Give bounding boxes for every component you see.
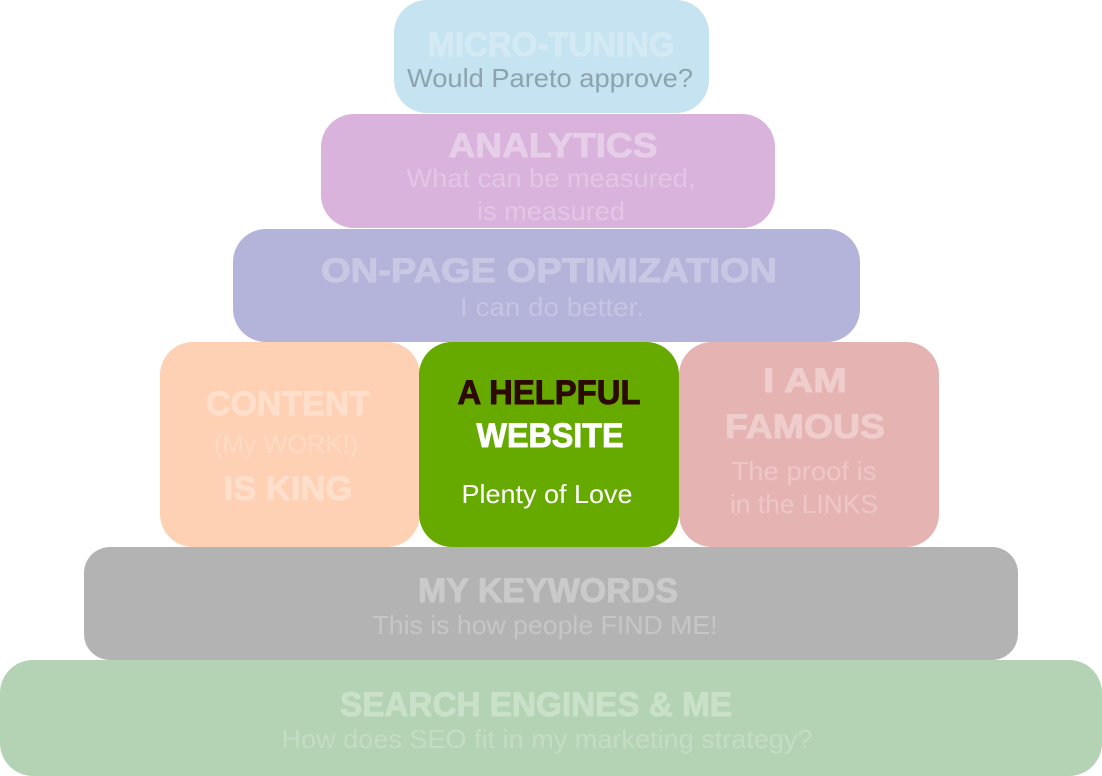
heading: search engines and me: SEARCH ENGINES & ME bbox=[340, 686, 732, 724]
text: is measured: is measured bbox=[477, 196, 625, 226]
heading: analytics: ANALYTICS bbox=[448, 127, 658, 165]
panel: search engines and me bbox=[0, 660, 1102, 776]
heading: famous: FAMOUS bbox=[725, 408, 885, 446]
text: this is how people find me: This is how people FIND ME! bbox=[372, 610, 718, 640]
heading: a helpful: A HELPFUL bbox=[458, 374, 640, 412]
heading: i am: I AM bbox=[763, 362, 847, 400]
panel: analytics bbox=[321, 114, 775, 228]
panel: my keywords bbox=[84, 547, 1018, 660]
heading: micro-tuning: MICRO-TUNING bbox=[428, 26, 674, 64]
heading: website: WEBSITE bbox=[476, 417, 624, 455]
heading: on-page optimization: ON-PAGE OPTIMIZATION bbox=[321, 252, 777, 290]
text: plenty of love: Plenty of Love bbox=[462, 479, 632, 509]
text: in the links: in the LINKS bbox=[730, 489, 878, 519]
panel: micro-tuning bbox=[394, 0, 709, 113]
heading: is king: IS KING bbox=[224, 470, 352, 508]
text: the proof is: The proof is bbox=[732, 456, 876, 486]
heading: my keywords: MY KEYWORDS bbox=[418, 572, 678, 610]
text: i can do better: I can do better. bbox=[460, 292, 644, 322]
panel: a helpful website bbox=[419, 342, 679, 547]
panel: on-page optimization bbox=[233, 229, 860, 342]
text: how does seo fit: How does SEO fit in my marketing strategy? bbox=[282, 724, 812, 754]
panel: i am famous bbox=[679, 342, 939, 547]
text: my work: (My WORK!) bbox=[214, 429, 358, 459]
text: what can be measured: What can be measured, bbox=[406, 163, 696, 193]
text: would pareto approve: Would Pareto approve? bbox=[407, 63, 693, 93]
panel: content is king bbox=[160, 342, 420, 547]
heading: content: CONTENT bbox=[206, 385, 370, 423]
